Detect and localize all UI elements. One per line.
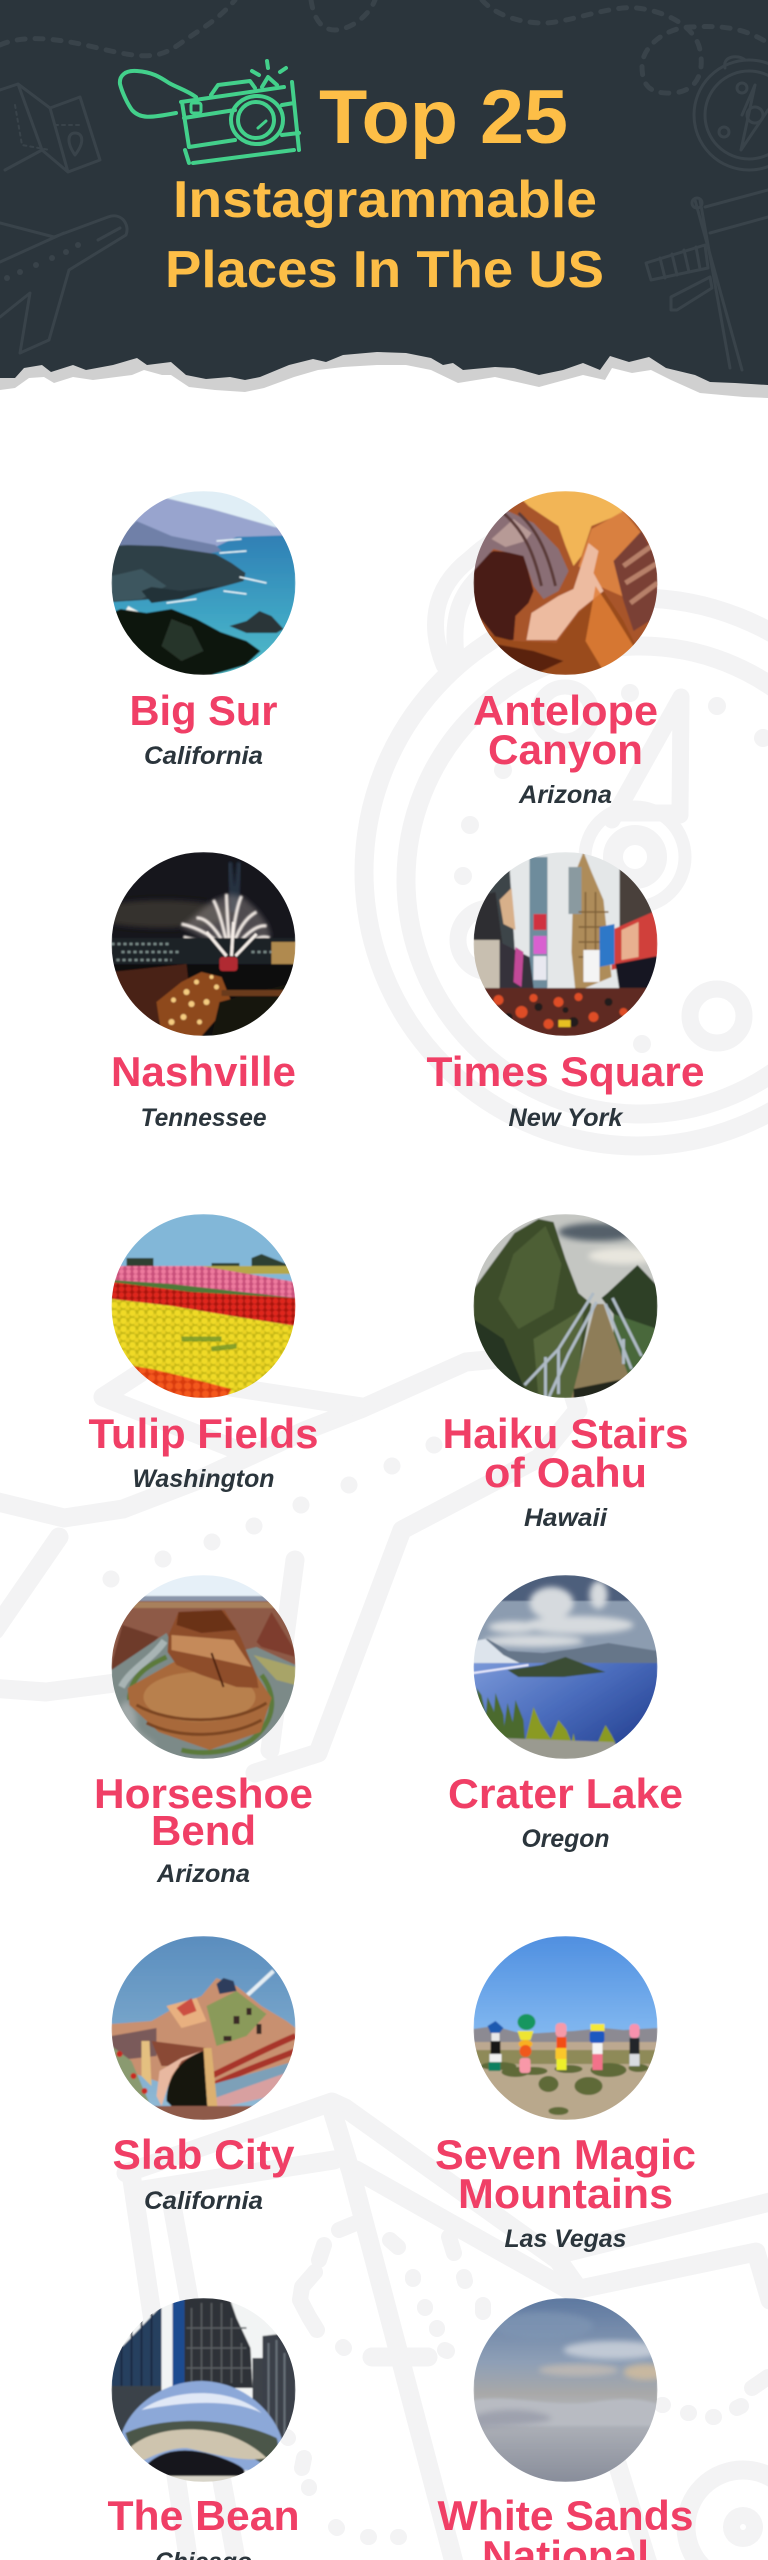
place name: Canyon [488, 726, 643, 773]
card: Nashville [112, 852, 296, 1126]
card: Crater Lake [448, 1575, 683, 1853]
card: Haiku Stairs [442, 1214, 688, 1532]
card: Antelope Canyon [473, 491, 658, 809]
card: Slab City [112, 1936, 296, 2215]
card: White Sands [438, 2298, 694, 2560]
card: Seven Magic Mountains [435, 1936, 696, 2253]
title line: Top 25: Top 25 [319, 75, 568, 160]
place name: Crater Lake [448, 1770, 683, 1817]
card: Times Square [426, 852, 704, 1132]
photo: Nashville fireworks [92, 852, 296, 1036]
background doodle: folded map [126, 2102, 768, 2560]
background doodle: compass [364, 530, 768, 1146]
state: California [144, 742, 263, 770]
state: New York [508, 1104, 624, 1132]
state: Washington [132, 1465, 274, 1493]
state: Hawaii [524, 1504, 608, 1532]
place name: Haiku Stairs [442, 1410, 688, 1457]
place name: Seven Magic [435, 2131, 696, 2178]
state: Oregon [522, 1825, 610, 1853]
title [165, 75, 604, 299]
photo: Horseshoe Bend [112, 1575, 296, 1759]
rock totems [488, 2014, 640, 2073]
place name [442, 1410, 688, 1496]
photo: Crater Lake [474, 1575, 658, 1759]
place name: The Bean [108, 2492, 300, 2539]
title line: Places In The US: Places In The US [165, 241, 604, 299]
place name: Times Square [426, 1048, 704, 1095]
photo: Times Square [474, 852, 658, 1036]
place name: Mountains [458, 2170, 673, 2217]
photo: Cloud Gate, Chicago [112, 2298, 296, 2482]
place name: Nashville [111, 1048, 296, 1095]
header doodles [0, 0, 768, 370]
photo: White Sands dunes [474, 2298, 668, 2482]
place name [473, 687, 658, 773]
place name: White Sands [438, 2492, 694, 2539]
dark header background [0, 0, 768, 400]
place name: of Oahu [484, 1449, 647, 1496]
photo: Seven Magic Mountains [474, 1936, 658, 2120]
photo: Slab City [112, 1936, 296, 2120]
header panel [0, 0, 768, 400]
place name [435, 2131, 696, 2217]
photo: Big Sur coast [112, 491, 296, 675]
state: Tennessee [140, 1104, 267, 1132]
place name [438, 2492, 694, 2560]
place name: Horseshoe [94, 1770, 313, 1817]
photo: Antelope Canyon [474, 491, 658, 675]
place name: Big Sur [130, 687, 278, 734]
place name: Slab City [112, 2131, 295, 2178]
title line: Instagrammable: Instagrammable [173, 171, 597, 229]
card: Tulip Fields [88, 1214, 318, 1493]
place name: Bend [151, 1807, 256, 1854]
background doodle: airplane [0, 1355, 578, 1773]
card: The Bean [108, 2298, 300, 2560]
place name: Antelope [473, 687, 658, 734]
photo: Tulip fields [112, 1214, 296, 1398]
card: Big Sur [112, 491, 296, 770]
photo: Haiku Stairs [474, 1214, 658, 1398]
state: Las Vegas [504, 2225, 627, 2253]
icon: camera [120, 61, 299, 163]
state: Arizona [518, 781, 612, 809]
place name [94, 1770, 313, 1854]
torn paper shadow [0, 0, 768, 398]
state: California [144, 2187, 263, 2215]
state: Arizona [156, 1860, 250, 1888]
place name: Tulip Fields [88, 1410, 318, 1457]
card: Horseshoe Bend [94, 1575, 313, 1888]
